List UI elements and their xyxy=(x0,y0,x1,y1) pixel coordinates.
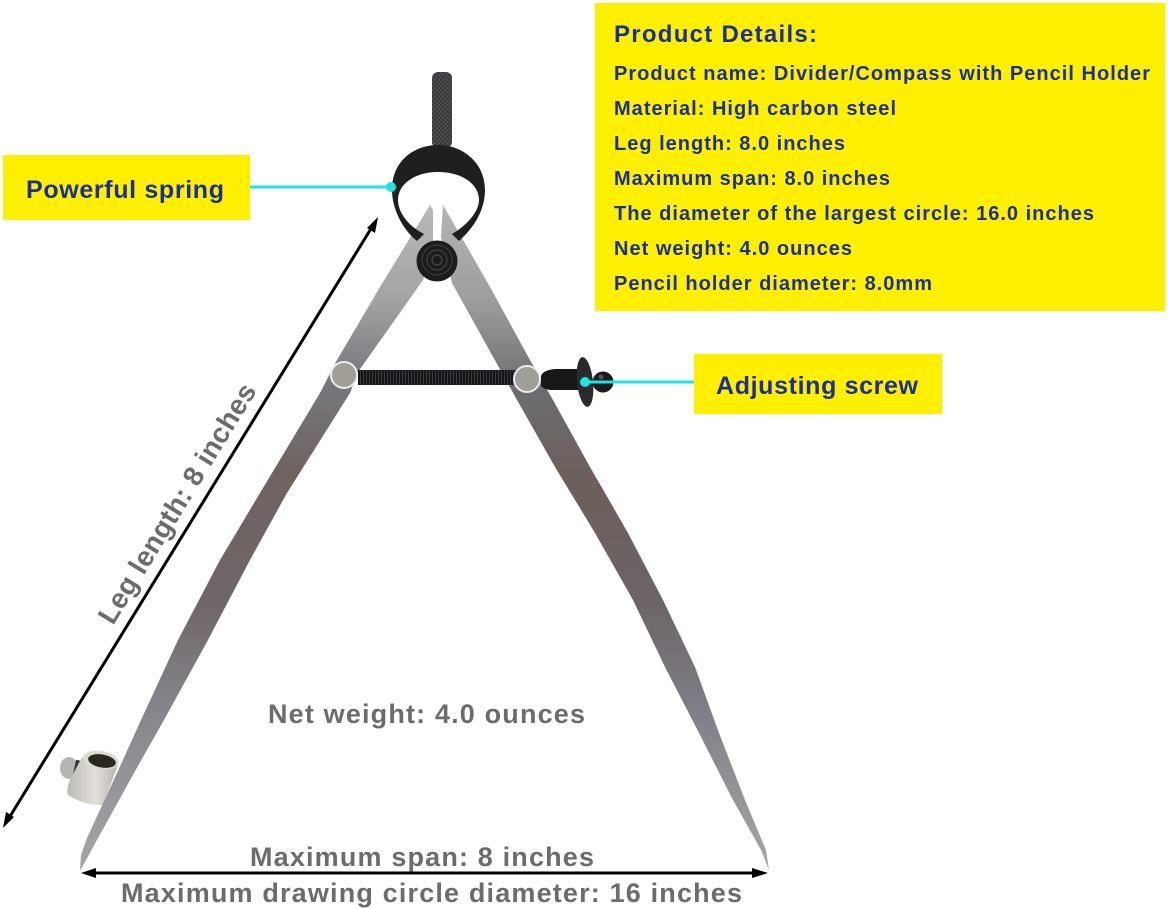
pencil collar xyxy=(60,748,120,805)
spec: largest circle: The diameter of the largest circle: 16.0 inches xyxy=(614,203,1094,225)
left leg xyxy=(80,205,433,871)
spring ring xyxy=(392,145,485,241)
adjusting screw xyxy=(541,356,614,408)
threaded rod xyxy=(358,370,516,385)
label: maximum span: Maximum span: 8 inches xyxy=(250,842,594,872)
spec: net weight: Net weight: 4.0 ounces xyxy=(614,238,852,260)
label: net weight: Net weight: 4.0 ounces xyxy=(268,699,585,729)
pivot knob xyxy=(416,240,458,282)
heading: product details: Product Details: xyxy=(614,21,817,48)
callout: powerful spring xyxy=(3,155,396,220)
spec: pencil holder: Pencil holder diameter: 8.0mm xyxy=(614,273,932,295)
callout: adjusting screw: Adjusting screw xyxy=(716,372,919,400)
spec: product name: Product name: Divider/Compass with Pencil Holder xyxy=(614,63,1150,85)
right leg xyxy=(441,205,769,870)
spec: maximum span: Maximum span: 8.0 inches xyxy=(614,168,890,190)
panel: product details xyxy=(595,3,1165,311)
callout: powerful spring: Powerful spring xyxy=(26,176,224,204)
right pin xyxy=(514,366,540,392)
label: leg length: Leg length: 8 inches xyxy=(92,378,262,629)
callout: adjusting screw xyxy=(580,354,942,414)
pencil holder shaft xyxy=(432,72,452,148)
arrow: span xyxy=(81,868,768,878)
arrow: leg length xyxy=(3,217,378,828)
label: maximum drawing circle diameter: Maximum drawing circle diameter: 16 inches xyxy=(121,878,742,908)
compass illustration xyxy=(80,72,769,871)
left pin xyxy=(331,362,357,388)
spec: leg length: Leg length: 8.0 inches xyxy=(614,133,845,155)
spec: material: Material: High carbon steel xyxy=(614,98,896,120)
